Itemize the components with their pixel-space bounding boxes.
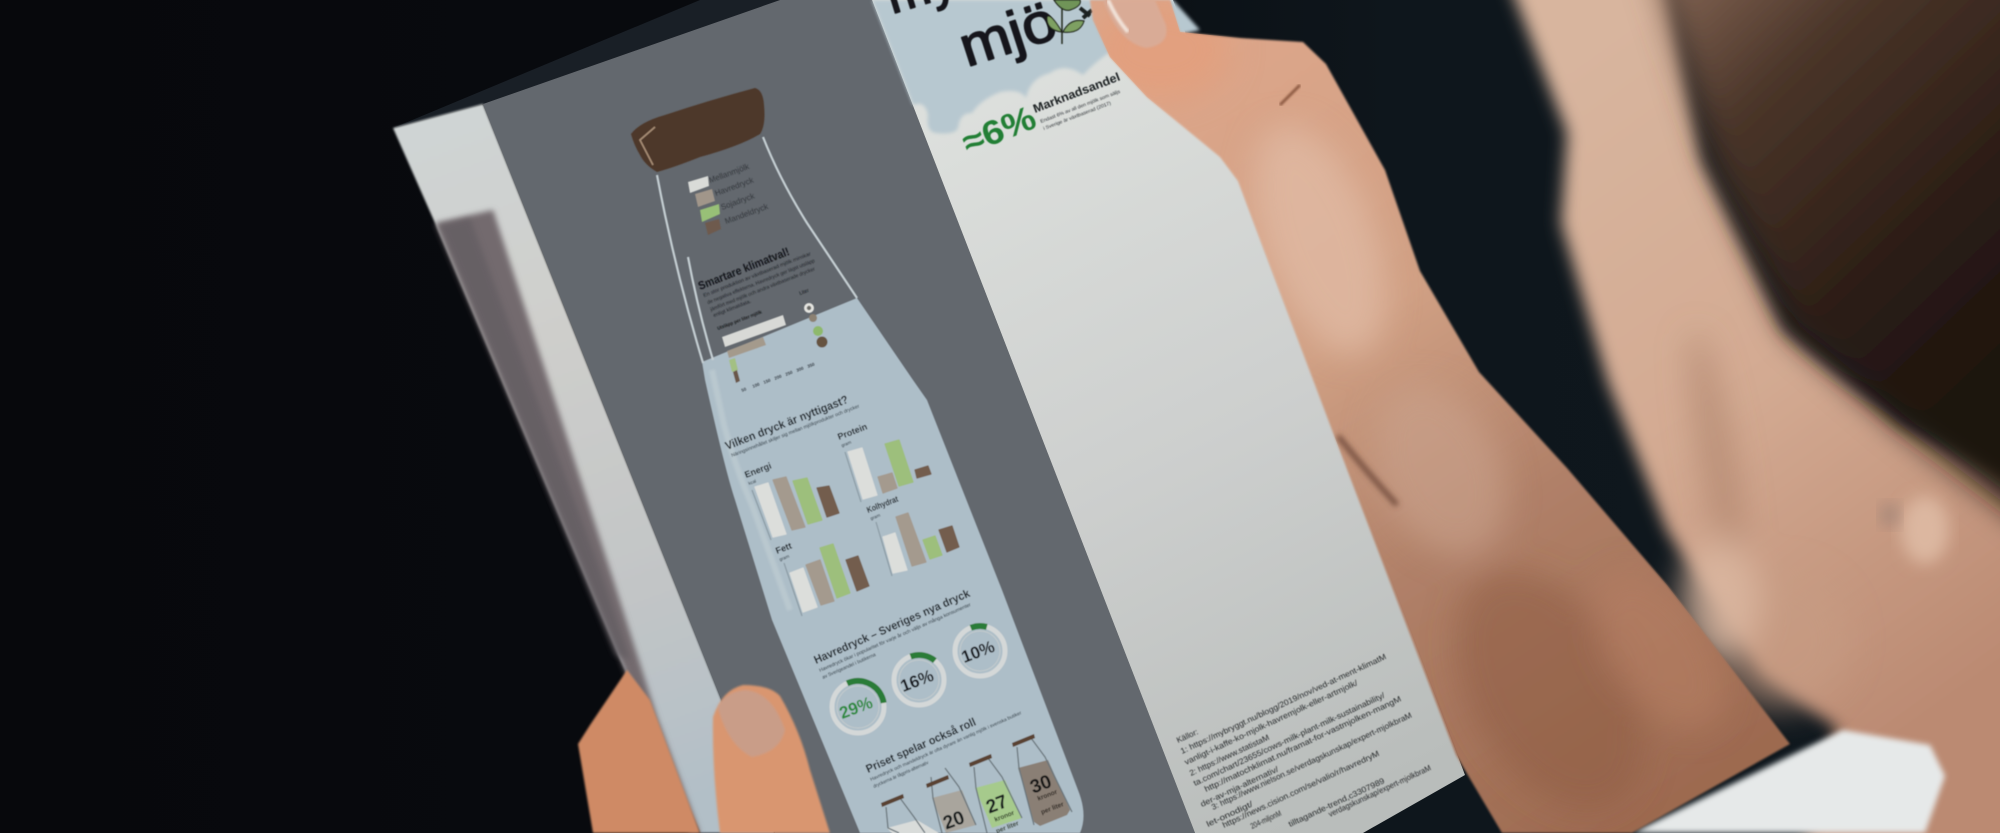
legend: Havredryck bbox=[714, 175, 756, 198]
climate horizontal bar chart: Utsläpp per liter mjölk bbox=[717, 309, 763, 331]
bottle: 20 kronor bbox=[926, 768, 976, 833]
sources text: ta.com/chart/23655/cows-milk-plant-milk-sustainability/ bbox=[1192, 691, 1387, 788]
left hand fingers bbox=[578, 670, 700, 833]
heading: Vilken dryck är nyttigast: Vilken dryck är nyttigast? bbox=[724, 394, 850, 453]
sources text: der-av-mja-alternativ/ bbox=[1199, 764, 1281, 809]
bar chart: Protein bbox=[836, 421, 931, 502]
donut: 16 percent bbox=[887, 648, 951, 712]
sources text: http://matochklimat.nu/framat-for-vastmjolken-mangM bbox=[1203, 694, 1403, 794]
heading: Priset spelar också roll: Priset spelar också roll bbox=[864, 716, 978, 776]
bar chart: Fett: Fett bbox=[774, 541, 793, 556]
heading: Smartare klimatval bbox=[697, 246, 816, 319]
legend: Mandeldryck bbox=[724, 202, 770, 226]
sources text: https://news.cision.com/se/valio/r/havredryM bbox=[1221, 749, 1381, 830]
heading: Priset spelar också roll: dryckerna är lågpris-alternativ bbox=[872, 759, 930, 790]
bar chart: Energi: kcal bbox=[748, 478, 757, 486]
stat: market share: Endast 6% av all den mjölk som säljs bbox=[1040, 89, 1122, 125]
bottle: 30 kronor bbox=[1012, 734, 1072, 826]
donut: 16 percent: 16% bbox=[898, 666, 936, 696]
heading: Havredryck: Havredryck ökar i popularitet för varje år och väljs av många konsumenter bbox=[818, 601, 972, 674]
bar chart: Energi: Energi bbox=[743, 460, 773, 480]
sources text: 1: https://mybryggt.nu/blogg/2019/nov/ved-at-ment-klimatM bbox=[1179, 652, 1388, 756]
climate horizontal bar chart: 50 bbox=[741, 386, 747, 393]
bar chart: Fett: gram bbox=[779, 554, 790, 562]
heading: Smartare klimatval: jämfört med mjölk och andra växtbaserade drycker bbox=[709, 266, 816, 313]
bar chart: Kolhydrat: Kolhydrat bbox=[865, 494, 900, 515]
donut: 29 percent bbox=[824, 673, 892, 741]
title bbox=[879, 0, 1064, 78]
climate horizontal bar chart: 250 bbox=[785, 369, 794, 377]
magazine page edge strip with inner photo bbox=[393, 104, 775, 833]
stat: market share: ≈6% bbox=[957, 99, 1041, 162]
stat: market share bbox=[957, 70, 1122, 162]
bar chart: Protein: Protein bbox=[836, 421, 869, 442]
icon: left thumb nail bbox=[718, 690, 785, 757]
header band with milk drips bbox=[872, 0, 1200, 133]
bottle: milk price bbox=[881, 794, 939, 833]
bar chart: Energi bbox=[743, 460, 839, 540]
sources text: let-onodigt/ bbox=[1205, 799, 1255, 829]
left page: grey background bbox=[483, 0, 1195, 833]
bottle milk body bbox=[702, 298, 1084, 833]
bottle: 30 kronor: per liter bbox=[1040, 801, 1065, 816]
heading: Smartare klimatval: de negativa effekterna. Havredryck ger lägst utsläpp bbox=[707, 258, 816, 306]
sources text: 3: https://www.nielson.se/verdagskunskap/expert-mjolkbraM bbox=[1210, 711, 1414, 812]
heading: Priset spelar också roll: Havredryck och mandeldryck är ofta dyrare än vanlig mjölk i svenska butiker bbox=[869, 710, 1023, 783]
sources text: verdagskunskap/expert-mjolkbraM bbox=[1327, 763, 1433, 819]
climate horizontal bar chart: 300 bbox=[796, 365, 805, 373]
arm shading bbox=[1090, 0, 1753, 833]
icon: plant leaves bbox=[1047, 0, 1092, 44]
donut: 29 percent: 29% bbox=[837, 693, 875, 723]
person: neck, hair and shirt bbox=[1508, 0, 2000, 833]
climate value circles: Liter bbox=[799, 288, 810, 297]
sources text: vanligt-i-kaffe-ko-mjolk-havremjolk-eller-artmjolk/ bbox=[1183, 678, 1360, 767]
bar chart: Protein: gram bbox=[841, 440, 852, 448]
bottle: 27 kronor: kronor bbox=[994, 809, 1016, 824]
heading: Smartare klimatval: Smartare klimatval! bbox=[697, 246, 791, 293]
bottle neck outlines bbox=[657, 137, 857, 363]
bottle: 30 kronor: kronor bbox=[1037, 788, 1059, 803]
bar chart: Kolhydrat bbox=[865, 494, 959, 576]
right hand and forearm bbox=[1090, 0, 1790, 833]
bar chart: Kolhydrat: gram bbox=[870, 513, 881, 521]
climate horizontal bar chart: 200 bbox=[774, 373, 783, 381]
stat: market share: Marknadsandel bbox=[1031, 70, 1122, 116]
bottle: 30 kronor: 30 bbox=[1027, 771, 1055, 798]
right page bbox=[872, 0, 1465, 833]
sources text bbox=[1175, 652, 1433, 831]
climate horizontal bar chart: 150 bbox=[763, 377, 772, 385]
magazine back cover edge bbox=[393, 0, 780, 128]
legend: Sojadryck bbox=[720, 191, 757, 212]
sources text: 2: https://www.statistaM bbox=[1188, 733, 1271, 778]
left thumb bbox=[713, 685, 830, 833]
heading: Smartare klimatval: En stor produktion av växtbaserad mjölk minskar bbox=[703, 251, 812, 299]
climate horizontal bar chart bbox=[717, 309, 816, 393]
sources text: Källor: bbox=[1175, 727, 1200, 745]
sources text: 204-miljonM bbox=[1249, 809, 1283, 831]
sources text: tilltagande-trend,c3307989 bbox=[1287, 776, 1387, 829]
donut: 10 percent bbox=[948, 619, 1012, 683]
bottle left highlight bbox=[712, 370, 790, 610]
bottle: 27 kronor bbox=[969, 754, 1022, 833]
climate horizontal bar chart: 350 bbox=[807, 361, 816, 369]
donut: 10 percent: 10% bbox=[959, 637, 997, 667]
legend bbox=[688, 162, 770, 235]
icon: thumb nail bbox=[1103, 0, 1167, 48]
legend: Mellanmjölk bbox=[708, 162, 751, 185]
heading: Havredryck: Havredryck – Sveriges nya dryck bbox=[812, 588, 972, 667]
stat: market share: i Sverige är växtbaserad (2017) bbox=[1043, 100, 1112, 132]
heading: Havredryck: av Sverigeandel i butikerna bbox=[821, 652, 877, 681]
bar chart: Fett bbox=[774, 541, 869, 616]
heading: Smartare klimatval: enligt klimatdata. bbox=[713, 299, 752, 319]
bottle: 27 kronor: 27 bbox=[983, 791, 1011, 818]
milk bottle infographic bbox=[631, 88, 1084, 833]
heading: Vilken dryck är nyttigast: Näringsinnehållet skiljer sig mellan mjölkprodukter och drycker bbox=[730, 402, 861, 459]
climate value circles bbox=[799, 288, 828, 348]
climate horizontal bar chart: 100 bbox=[752, 381, 761, 389]
bottle cap bbox=[631, 88, 764, 172]
